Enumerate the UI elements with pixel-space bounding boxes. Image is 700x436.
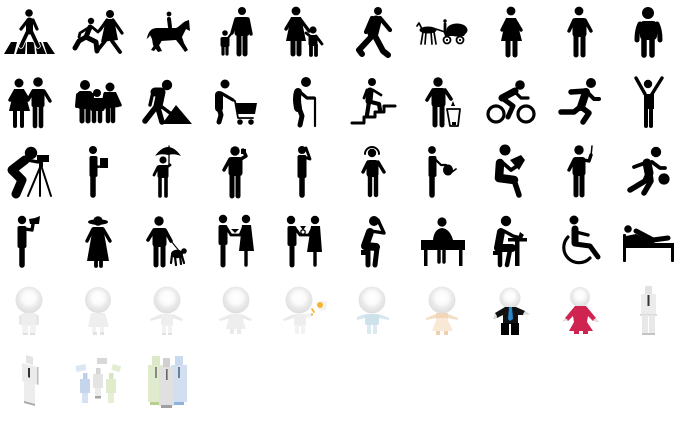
icon: seated person reading bbox=[499, 144, 525, 195]
icon: person at desk bbox=[421, 217, 465, 266]
icon: elderly man with cane bbox=[297, 77, 315, 126]
icon: family group bbox=[77, 80, 120, 121]
icon: man bbox=[569, 7, 591, 55]
icon: person using binoculars bbox=[224, 146, 246, 196]
icon: seated thinker bbox=[361, 216, 384, 265]
icon: white figure, plain bbox=[16, 286, 42, 335]
icon: person with headphones bbox=[363, 147, 384, 195]
icon: woman bbox=[501, 7, 522, 55]
icon: white figure, dress bbox=[85, 287, 111, 335]
icon: person with arms raised bbox=[636, 78, 662, 126]
icon: person with watering can bbox=[428, 146, 456, 195]
icon: cyclist bbox=[488, 80, 534, 122]
icon: large man bbox=[637, 7, 660, 55]
icon: pedestrian crossing bbox=[4, 9, 55, 54]
icon: white figure with megaphone bbox=[283, 286, 327, 334]
icon: basketball player bbox=[630, 147, 670, 193]
icon: woman and child bbox=[286, 7, 322, 55]
icon: white figure, dress arms out bbox=[219, 286, 252, 334]
icon: man and child bbox=[220, 7, 251, 54]
icon: adult and child running bbox=[75, 10, 122, 52]
icon: person lying on bed bbox=[623, 225, 674, 262]
icon: wheelchair user bbox=[564, 216, 598, 263]
icon: man using trash bin bbox=[427, 77, 460, 126]
icon: horse and rider bbox=[146, 12, 190, 52]
icon: three business figures bbox=[148, 356, 187, 408]
icon: figure in pale blue bbox=[357, 286, 389, 334]
icon: man with shopping cart bbox=[219, 80, 257, 125]
icon: person with umbrella bbox=[154, 146, 181, 196]
icon: person taking a photo bbox=[18, 216, 40, 265]
icon: man holding a box bbox=[89, 146, 108, 195]
icon: white business figure bbox=[640, 286, 657, 335]
icon: couple with ring bbox=[287, 216, 322, 265]
icon: climbing stairs bbox=[352, 78, 395, 123]
icon: figure in peach dress bbox=[426, 286, 458, 335]
icon: person with pointer bbox=[569, 145, 592, 195]
icon: white figure, arms out bbox=[150, 286, 183, 335]
icon: figure in black suit bbox=[493, 288, 530, 335]
icon: group conversation with speech bubbles bbox=[75, 358, 121, 403]
icon: photographer with tripod bbox=[12, 147, 51, 196]
icon: couple bbox=[9, 77, 50, 126]
icon: man walking dog bbox=[148, 216, 187, 265]
icon: figure in red dress bbox=[562, 287, 599, 334]
icon: walking man bbox=[359, 7, 390, 55]
icon: horse carriage bbox=[417, 19, 468, 44]
icon: person on telephone bbox=[298, 146, 310, 195]
icon: person seated writing bbox=[493, 216, 527, 266]
icon: isometric white business figure bbox=[22, 355, 38, 406]
icon: woman with hat bbox=[87, 216, 110, 266]
icon: couple with gift bbox=[218, 215, 254, 265]
icon: road worker bbox=[145, 80, 192, 124]
icon: runner bbox=[561, 78, 599, 122]
